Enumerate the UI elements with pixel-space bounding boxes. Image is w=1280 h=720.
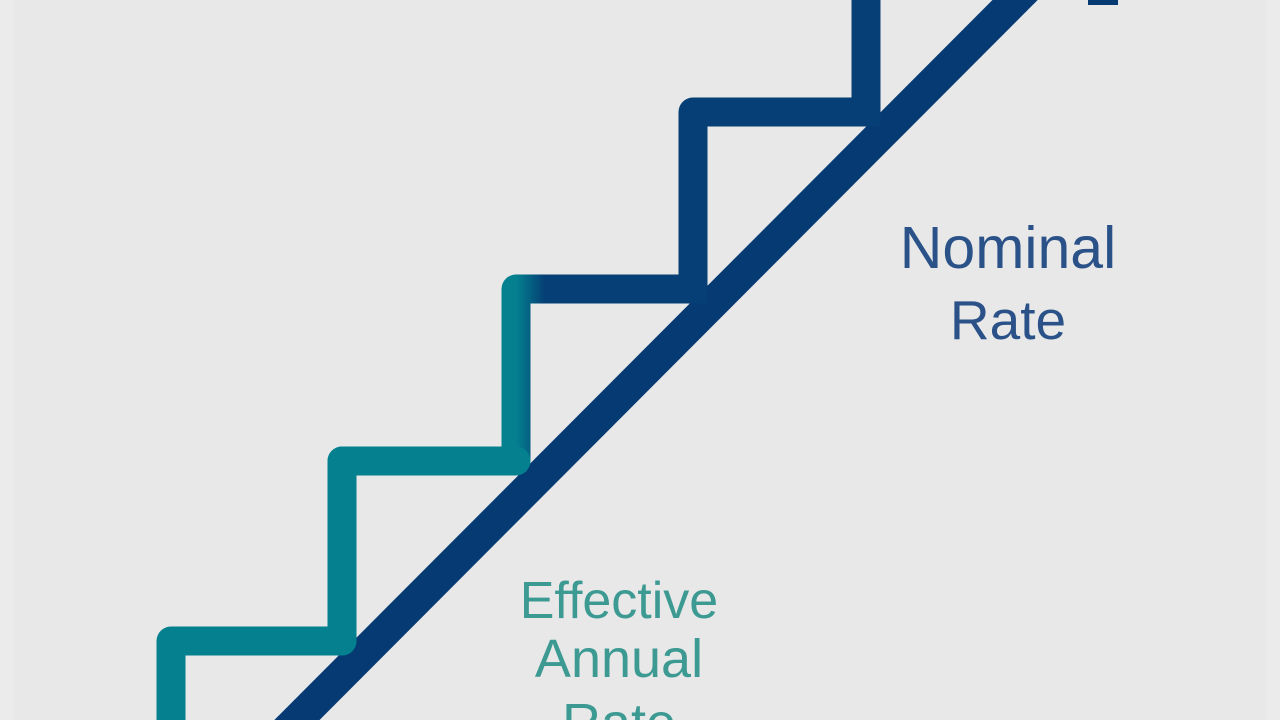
teal lower stairs <box>171 461 516 720</box>
label: effective annual rate <box>520 572 718 720</box>
label: effective annual rate: Effective <box>520 572 718 630</box>
teal to navy transition step <box>516 289 706 461</box>
navy upper stairs <box>693 0 880 296</box>
nominal rate diagonal line <box>270 0 1042 720</box>
icon: top edge fragment <box>1088 0 1118 5</box>
label: nominal rate: Nominal <box>900 215 1116 281</box>
label: nominal rate: Rate <box>950 289 1066 351</box>
label: nominal rate <box>900 215 1116 351</box>
label: effective annual rate: Annual <box>535 629 703 689</box>
